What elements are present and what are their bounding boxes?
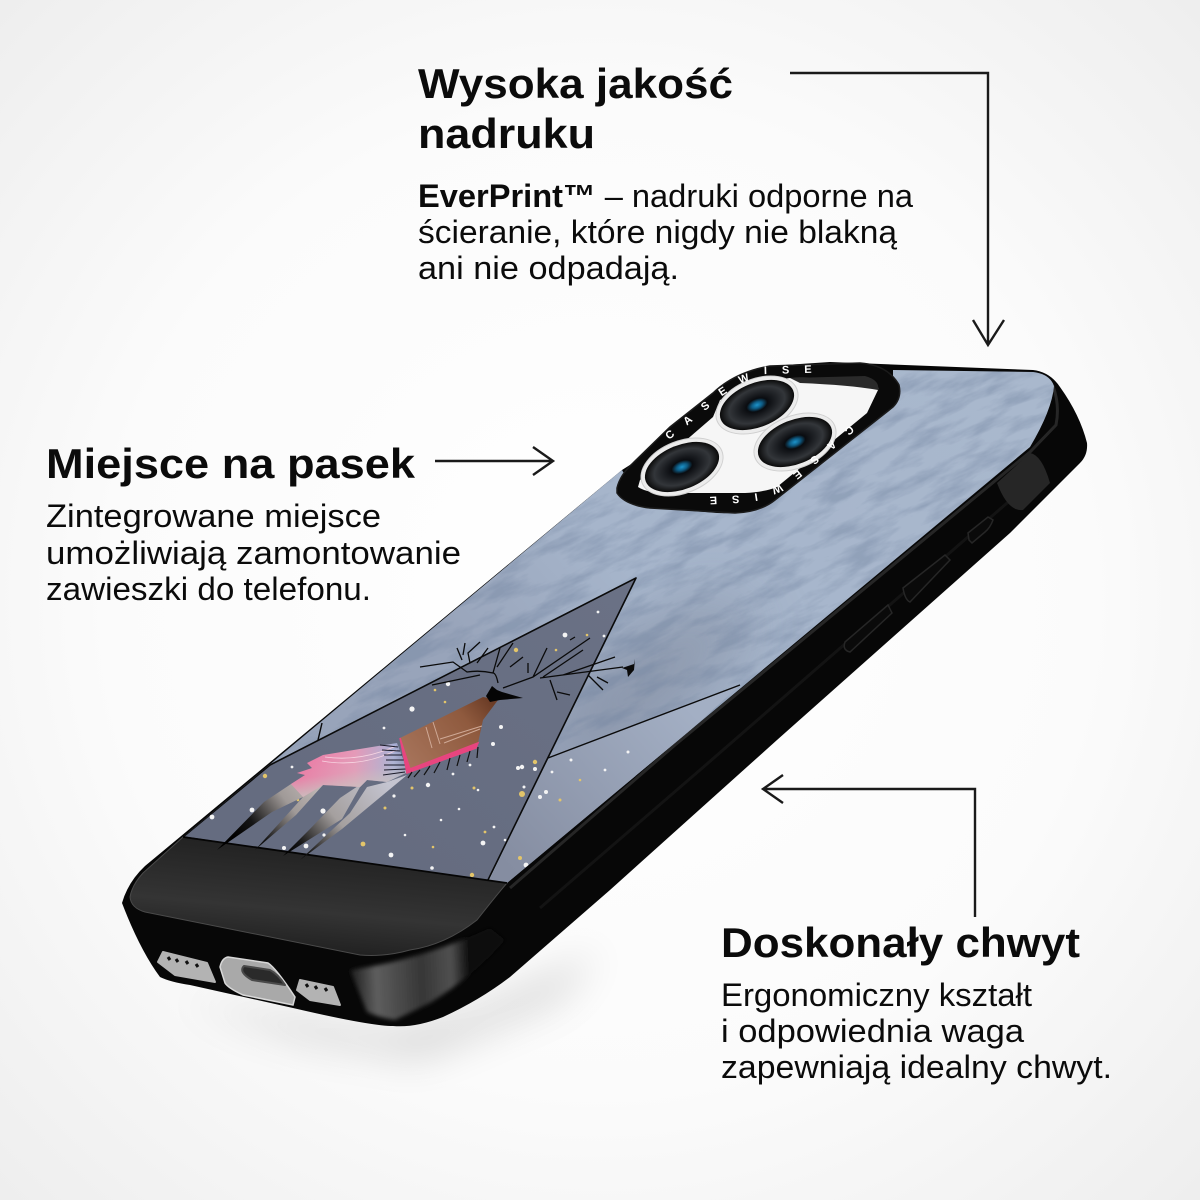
port opening [242,966,285,985]
description: i odpowiednia waga [721,1013,1024,1049]
case body [122,362,1087,1026]
body pattern [322,746,397,763]
front legs [283,775,407,860]
head [486,686,523,702]
hind legs [217,778,323,850]
bird [622,659,635,677]
description: ani nie odpadają. [418,250,679,286]
deer [217,637,635,860]
mane hatching [380,745,406,775]
scarf pink trim [400,738,478,773]
callout: grip [721,919,1112,1085]
description: zawieszki do telefonu. [46,571,371,607]
lower light facet [487,685,740,890]
volume button lower [844,605,892,652]
ring lettering top: CASEWISE [666,365,812,438]
scarf neck [400,697,498,769]
stars yellow [263,634,588,877]
speaker holes right [306,984,327,991]
antlers [420,637,623,700]
description [721,977,1112,1085]
fringe [408,747,478,778]
description [46,498,461,607]
glossy bottom corner [350,928,505,1020]
artwork triangle [183,578,636,882]
arrow: grip [763,775,975,917]
band top line [183,837,507,883]
strap slot [997,453,1050,510]
lens 1 [707,365,807,445]
description: ścieranie, które nigdy nie blakną [418,214,897,250]
small facet line [318,723,322,740]
phone shadow [180,950,600,1060]
dusky haze [564,588,755,748]
lens 2 [745,402,845,482]
heading: nadruku [418,110,595,157]
top shadow strip [790,376,878,390]
scarf pattern [426,722,482,748]
heading: Doskonały chwyt [721,919,1080,966]
stars white [210,611,630,870]
body lower shading [291,743,408,797]
side ridge [540,470,1045,908]
description: zapewniają idealny chwyt. [721,1049,1112,1085]
description: Zintegrowane miejsce [46,498,381,534]
ring lettering bottom: CASEWISE [710,426,854,504]
lens 3 [632,427,732,507]
printed back panel [184,370,1054,882]
blue textured background [180,365,1060,890]
arrow: print quality [790,73,1004,345]
description [418,178,913,286]
clear camera plate [638,377,878,493]
heading [418,60,733,157]
arrow: strap slot [435,447,553,475]
speaker holes [168,957,198,967]
bottom speaker left [158,952,215,982]
description: EverPrint™ – nadruki odporne na [418,178,913,214]
callout: strap slot [46,440,461,607]
black bottom band [130,837,507,955]
camera module [616,362,900,514]
phone case [122,362,1088,1026]
description: umożliwiają zamontowanie [46,535,461,571]
horizon line [548,685,740,758]
callout: print quality [418,60,913,286]
volume button upper [903,555,950,602]
bottom speaker right [297,980,340,1005]
side highlight rim [510,386,1057,888]
mute switch [968,517,993,543]
texture [304,372,1054,746]
deer body [291,743,408,797]
heading: Miejsce na pasek [46,440,416,487]
camera ring [617,363,900,513]
description: Ergonomiczny kształt [721,977,1032,1013]
heading: Wysoka jakość [418,60,733,107]
charging port [220,957,295,1005]
